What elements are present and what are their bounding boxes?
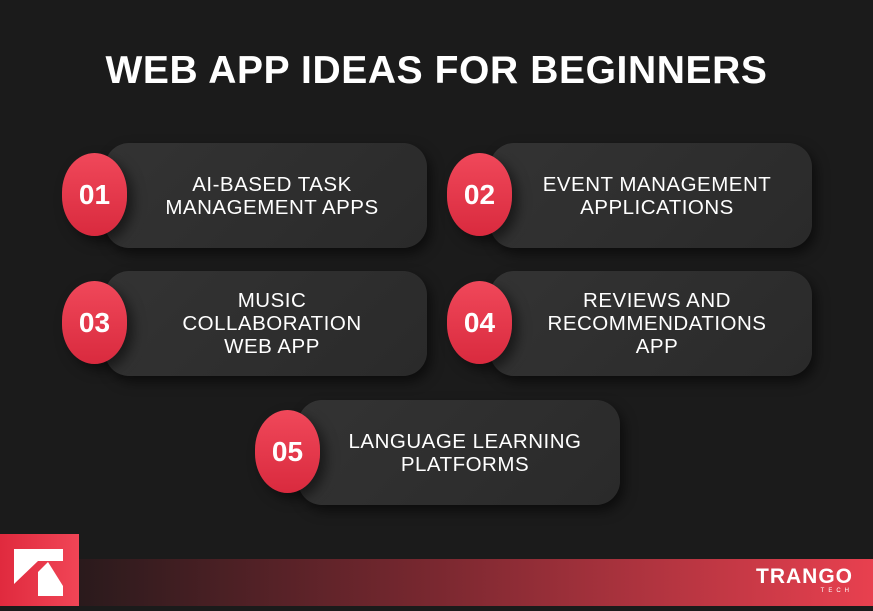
- item 05: [255, 400, 624, 510]
- item 02: APPLICATIONS: [580, 196, 734, 218]
- logo text: TRANGO: [756, 565, 853, 588]
- item 03: [62, 271, 430, 382]
- item 01: AI-BASED TASK: [192, 172, 352, 196]
- item 05: LANGUAGE LEARNING: [349, 430, 581, 452]
- item 02: EVENT MANAGEMENT: [543, 172, 771, 196]
- logo icon: [0, 534, 79, 606]
- item 03: WEB APP: [224, 335, 320, 358]
- footer bar: [79, 559, 873, 606]
- item 05: 05: [272, 436, 303, 466]
- item 01: MANAGEMENT APPS: [165, 196, 379, 218]
- item 03: COLLABORATION: [182, 312, 362, 335]
- item 01: 01: [79, 178, 110, 210]
- item 04: RECOMMENDATIONS: [548, 312, 766, 335]
- item 02: 02: [464, 178, 495, 210]
- item 01: [62, 143, 430, 254]
- logo text: TECH: [821, 588, 853, 594]
- item 04: [447, 271, 816, 382]
- item 03: 03: [79, 306, 110, 338]
- item 03: MUSIC: [238, 289, 306, 312]
- title: WEB APP IDEAS FOR BEGINNERS: [106, 49, 767, 92]
- item 04: 04: [464, 306, 495, 338]
- item 04: APP: [636, 335, 678, 358]
- item 04: REVIEWS AND: [583, 289, 731, 312]
- item 02: [447, 143, 816, 254]
- item 05: PLATFORMS: [401, 452, 529, 476]
